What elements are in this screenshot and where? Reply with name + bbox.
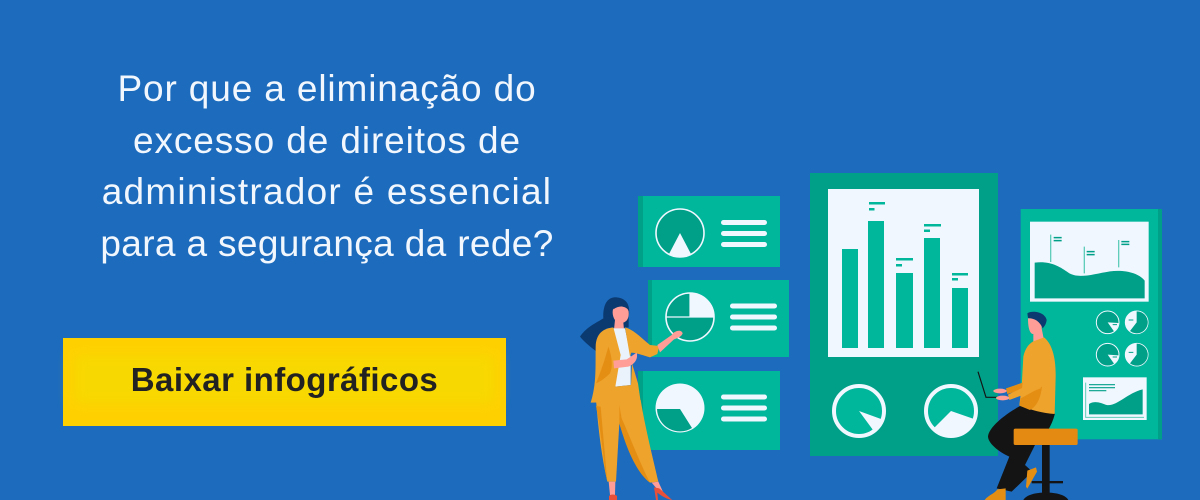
gauge right [926, 386, 976, 436]
title: para a segurança da rede? [100, 223, 554, 264]
head [1028, 318, 1044, 342]
panel: right dashboard [1021, 209, 1162, 439]
panel: bottom pie card [638, 371, 780, 450]
shirt [613, 328, 631, 387]
panel: top-left pie card [638, 196, 780, 267]
shoes [1026, 467, 1037, 489]
legs and shoes [609, 482, 615, 495]
download button: Baixar infográficos [131, 361, 438, 398]
hand at waist [613, 353, 637, 368]
bar chart [828, 189, 979, 357]
panel: central dashboard [810, 173, 998, 456]
stool seat [1014, 429, 1078, 445]
title: excesso de direitos de [133, 120, 521, 161]
mini area chart [1083, 377, 1147, 420]
jacket [591, 327, 641, 403]
torso [1019, 337, 1056, 414]
arms and hands [1006, 383, 1023, 394]
download button [63, 338, 506, 426]
legs [988, 406, 1055, 492]
area chart [1030, 222, 1149, 302]
title: Por que a eliminação do [117, 68, 537, 109]
gauge left [834, 386, 884, 436]
title: administrador é essencial [102, 171, 552, 212]
title [100, 68, 554, 264]
hair [580, 297, 629, 352]
figure: woman presenting [580, 297, 683, 500]
face and neck [613, 305, 629, 329]
stool [1023, 443, 1068, 500]
figure: man on stool with laptop [978, 312, 1078, 500]
laptop [978, 372, 1003, 397]
trousers [596, 400, 658, 483]
forearm and hand pointing [657, 331, 683, 352]
small pies [1096, 311, 1148, 366]
panel: middle pie card [648, 280, 789, 357]
